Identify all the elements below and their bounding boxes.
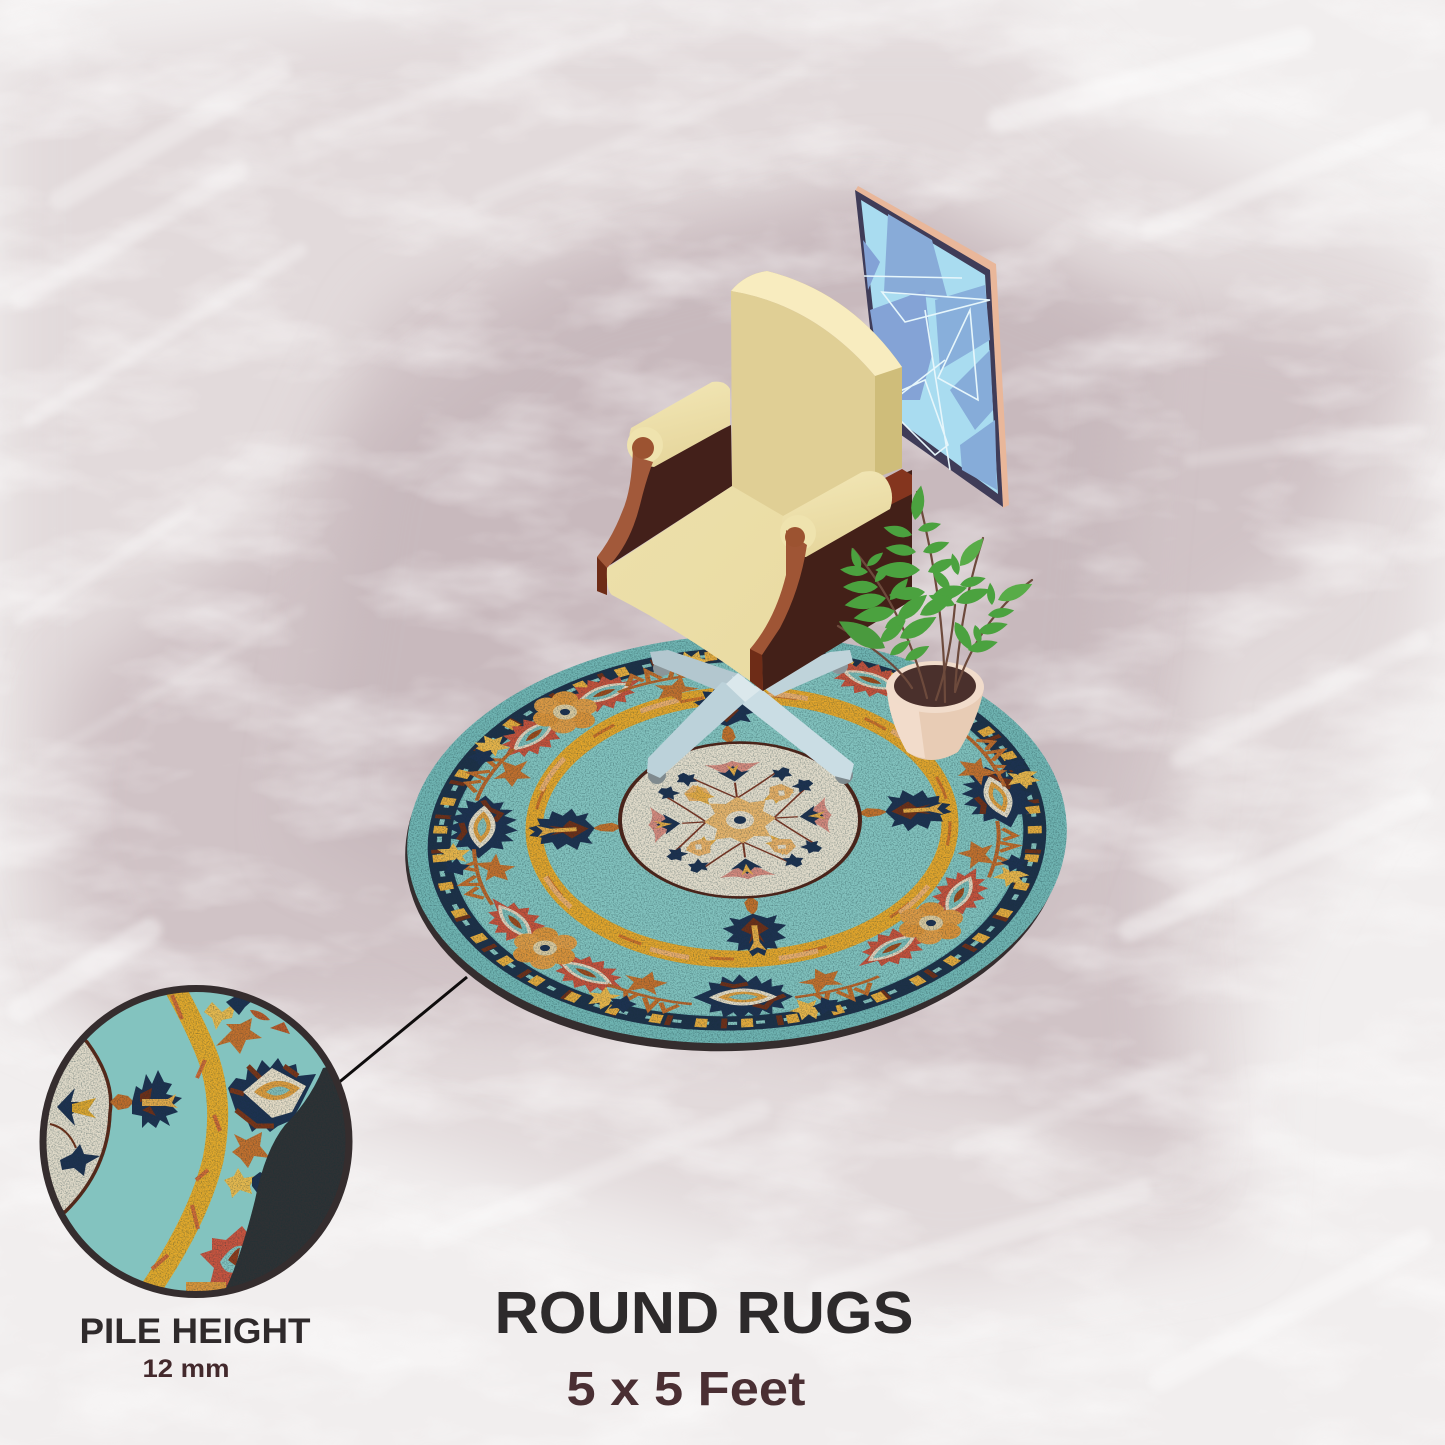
- seat cushion: [607, 486, 790, 681]
- pile height detail circle: [40, 985, 360, 1300]
- pile height value: 12 mm: [142, 1355, 230, 1383]
- wall mirror with blue abstract glass: [855, 186, 1009, 508]
- leaves: [834, 484, 1035, 664]
- chair star base with casters: [647, 650, 854, 784]
- round rug: [398, 621, 1076, 1057]
- right brown arm support: [750, 530, 807, 691]
- chair back: [731, 271, 902, 478]
- inset medallion ornament: [50, 1088, 100, 1176]
- pile height label: PILE HEIGHT: [80, 1312, 310, 1351]
- inset navy eye motif: [228, 1058, 316, 1132]
- right arm roll: [782, 471, 892, 557]
- stems: [838, 492, 1032, 702]
- product title: ROUND RUGS: [494, 1280, 914, 1346]
- rug inner field and golden ring: [529, 688, 955, 966]
- left brown arm support: [597, 447, 653, 595]
- inset golden band: [150, 985, 218, 1290]
- inset pendant motif: [110, 1070, 182, 1128]
- pot: [887, 688, 984, 760]
- pointer line from rug to detail circle: [337, 977, 467, 1084]
- left arm roll: [629, 382, 730, 467]
- rug border rings: [398, 621, 1076, 1057]
- executive chair: [597, 271, 912, 691]
- inset black backing: [226, 1067, 346, 1288]
- right dark side panel: [750, 470, 912, 691]
- rug border motifs: [432, 647, 1047, 1027]
- inset medallion: [46, 1040, 112, 1214]
- round rug shadow: [396, 627, 1072, 1065]
- inset border fragments: [186, 990, 290, 1296]
- product size: 5 x 5 Feet: [566, 1363, 806, 1416]
- rug central medallion: [510, 672, 970, 968]
- potted plant: [834, 484, 1035, 760]
- left dark side panel: [610, 425, 732, 565]
